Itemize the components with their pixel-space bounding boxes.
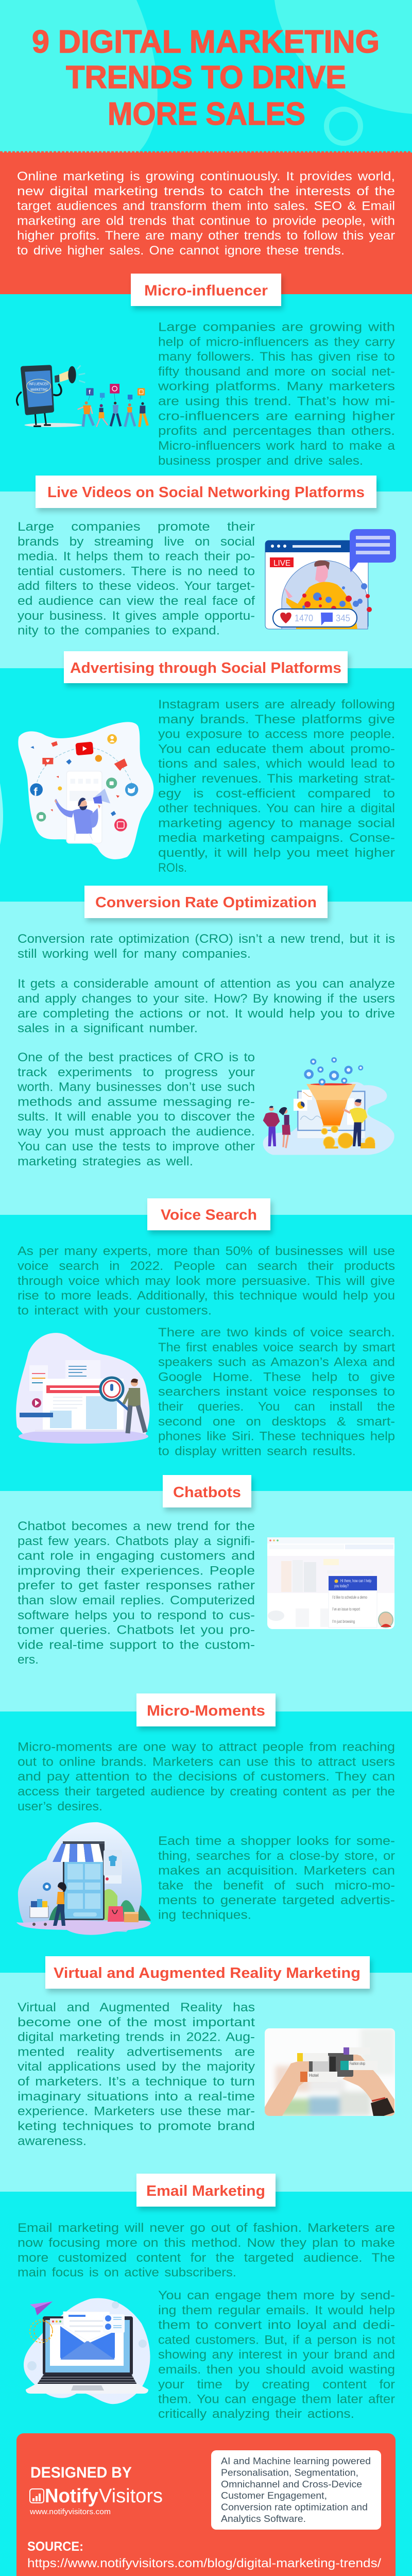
intro text: target audiences and transform them into sales. SEO & Email bbox=[17, 199, 395, 213]
text: conversion rate third paragraph: One of the best practices of CRO is to bbox=[18, 1050, 255, 1064]
text: email marketing second paragraph: your time by creating content for bbox=[158, 2378, 395, 2392]
heading: Chatbots bbox=[163, 1475, 251, 1507]
heading: Chatbots: Chatbots bbox=[173, 1484, 241, 1501]
heading: Live Videos bbox=[36, 476, 376, 508]
illustration: mobile shop and shopper bbox=[16, 1822, 151, 1935]
photo: hands holding phone with AR tags: Hotel bbox=[309, 2073, 319, 2078]
text: voice search second paragraph: their queries. You can install the bbox=[158, 1400, 395, 1414]
text: email marketing intro: main focus is on active subscribers. bbox=[18, 2266, 236, 2279]
description box: Customer Engagement, bbox=[221, 2490, 327, 2501]
text: conversion rate third paragraph: methods and assume messaging re- bbox=[18, 1095, 255, 1109]
description box bbox=[211, 2450, 381, 2530]
text: email marketing second paragraph: ing them regular emails. It would help bbox=[158, 2303, 395, 2317]
illustration: influencer marketing phone and followers: INFLUENCER bbox=[29, 382, 48, 386]
description box: AI and Machine learning powered bbox=[221, 2456, 371, 2466]
text: email marketing second paragraph: showing any interest in your brand and bbox=[158, 2348, 395, 2362]
description box: Analytics Software. bbox=[221, 2514, 306, 2524]
source: https://www.notifyvisitors.com/blog/digital-marketing-trends/ bbox=[27, 2556, 381, 2570]
text: micro-influencer: fifty thousand and more on social net- bbox=[158, 365, 395, 379]
text: conversion rate third paragraph: sults. It will enable you to discover the bbox=[18, 1110, 255, 1124]
text: chatbots: prefer to get faster responses rather bbox=[18, 1579, 255, 1592]
text: micro-influencer: are using this trend. That’s how mi- bbox=[158, 395, 395, 408]
text: micro-influencer bbox=[158, 320, 396, 468]
illustration: chatbot website screenshot: you today? bbox=[334, 1584, 349, 1588]
text: chatbots: Chatbot becomes a new trend for the bbox=[18, 1519, 255, 1533]
text: voice search second paragraph bbox=[158, 1326, 395, 1458]
section background: live videos bbox=[0, 492, 412, 668]
intro text: higher profits. There are many other trends to follow this year bbox=[17, 229, 395, 243]
text: virtual and augmented reality: mented reality advertisements are bbox=[18, 2045, 255, 2059]
text: conversion rate third paragraph: worth. Many businesses don’t use such bbox=[17, 1080, 255, 1094]
intro text: new digital marketing trends to catch the interests of the bbox=[17, 184, 395, 198]
section background: advertising bbox=[0, 668, 412, 902]
illustration: chatbot website screenshot bbox=[267, 1537, 394, 1629]
text: micro-influencer: profits and percentages than others. bbox=[158, 424, 395, 438]
heading: Virtual and Augmented Reality Marketing: Virtual and Augmented Reality Marketing bbox=[54, 1965, 360, 1981]
section background: email marketing bbox=[0, 2192, 412, 2576]
text: conversion rate intro: Conversion rate optimization (CRO) isn’t a new trend, but it is bbox=[18, 932, 395, 946]
text: voice search second paragraph: speakers such as Amazon’s Alexa and bbox=[158, 1355, 395, 1369]
intro text: Online marketing is growing continuously. It provides world, bbox=[17, 170, 395, 183]
text: voice search intro: As per many experts, more than 50% of businesses will use bbox=[18, 1244, 395, 1258]
text: advertising: Instagram users are already following bbox=[158, 698, 395, 711]
section background: chatbots bbox=[0, 1491, 412, 1711]
text: voice search second paragraph: second one on desktops & smart- bbox=[158, 1415, 395, 1429]
text: conversion rate second paragraph: sales in a significant number. bbox=[18, 1021, 198, 1036]
heading: Micro-influencer bbox=[131, 274, 281, 306]
text: chatbots: past few years. Chatbots play a signifi- bbox=[18, 1534, 255, 1548]
text: live videos: Large companies promote their bbox=[18, 520, 255, 534]
intro text bbox=[17, 170, 395, 258]
text: micro-influencer: cro-influencers are earning higher bbox=[158, 409, 395, 423]
source bbox=[27, 2539, 381, 2570]
text: micro-moments second paragraph: ing techniques. bbox=[158, 1908, 251, 1922]
text: micro-moments second paragraph: Each time a shopper looks for some- bbox=[158, 1834, 395, 1848]
heading: Conversion Rate Optimization bbox=[84, 886, 328, 918]
header background bbox=[0, 0, 412, 152]
text: micro-moments intro: access their targeted audience by creating content as per the bbox=[18, 1785, 395, 1799]
text: advertising: higher revenues. This marketing strat- bbox=[158, 772, 395, 786]
text: virtual and augmented reality: Virtual and Augmented Reality has bbox=[18, 2001, 255, 2014]
text: voice search second paragraph: Google Home. These help to give bbox=[158, 1370, 395, 1384]
description box: Omnichannel and Cross-Device bbox=[221, 2479, 362, 2489]
text: conversion rate third paragraph: way you must approach the audience. bbox=[17, 1125, 255, 1139]
text: micro-influencer: many followers. This has given rise to bbox=[158, 350, 395, 364]
section background: micro-moments bbox=[0, 1711, 412, 1973]
text: email marketing intro bbox=[18, 2221, 395, 2279]
text: virtual and augmented reality: imaginary situations into a real-time bbox=[18, 2090, 255, 2104]
text: voice search second paragraph: searchers instant voice responses to bbox=[158, 1385, 395, 1399]
section background: micro-influencer bbox=[0, 294, 412, 492]
designed by: DESIGNED BY bbox=[30, 2464, 132, 2481]
heading: Virtual and Augmented Reality Marketing bbox=[45, 1956, 370, 1989]
text: chatbots: software helps you to respond to cus- bbox=[18, 1608, 255, 1622]
text: voice search second paragraph: phones like Siri. These techniques help bbox=[158, 1430, 395, 1444]
footer panel bbox=[16, 2433, 396, 2576]
intro text: to drive higher sales. One cannot ignore these trends. bbox=[17, 244, 345, 258]
text: voice search second paragraph: to display written search results. bbox=[158, 1445, 356, 1458]
text: micro-influencer: working platforms. Many marketers bbox=[158, 380, 395, 394]
text: live videos: your business. It gives ample opportu- bbox=[18, 609, 255, 623]
text: conversion rate second paragraph: It gets a considerable amount of attention as you can analyze bbox=[18, 977, 395, 991]
text: email marketing second paragraph: emails. then you should avoid wasting bbox=[158, 2363, 395, 2377]
illustration: voice search bbox=[16, 1333, 149, 1444]
text: advertising: many brands. These platforms give bbox=[158, 713, 395, 726]
text: chatbots: ers. bbox=[18, 1653, 39, 1667]
website: www.notifyvisitors.com bbox=[29, 2507, 111, 2516]
text: advertising bbox=[158, 698, 395, 875]
photo: hands holding phone with AR tags bbox=[265, 2028, 395, 2116]
text: email marketing intro: more customized content for the targeted audience. The bbox=[18, 2251, 395, 2265]
text: advertising: marketing agency to manage social bbox=[158, 816, 395, 830]
text: email marketing intro: now focusing more on this method. Now they plan to make bbox=[18, 2236, 395, 2250]
text: advertising: other techniques. You can hire a digital bbox=[158, 802, 395, 816]
text: micro-moments second paragraph: ments to generate targeted advertis- bbox=[158, 1893, 395, 1907]
description box: Personalisation, Segmentation, bbox=[221, 2468, 358, 2478]
section background: intro bbox=[0, 152, 412, 294]
text: live videos: nity to the companies to expand. bbox=[18, 623, 220, 638]
illustration: social media advertising: f bbox=[33, 785, 38, 798]
text: advertising: tions and sales, which would lead to bbox=[158, 757, 395, 771]
text: conversion rate second paragraph: are completing the actions or not. It would help you to drive bbox=[18, 1007, 395, 1021]
illustration: chatbot website screenshot: I’m just browsing bbox=[332, 1619, 355, 1624]
text: live videos: ed audience can view the real face of bbox=[18, 594, 255, 608]
text: micro-moments intro: Micro-moments are one way to attract people from reaching bbox=[18, 1740, 395, 1754]
text: advertising: quently, it will help you meet higher bbox=[158, 846, 395, 860]
illustration: influencer marketing phone and followers: f bbox=[89, 389, 91, 396]
text: voice search intro bbox=[18, 1244, 395, 1318]
heading: Voice Search: Voice Search bbox=[161, 1207, 257, 1223]
text: virtual and augmented reality: keting techniques to promote brand bbox=[18, 2119, 255, 2133]
text: chatbots: than slow email replies. Computerized bbox=[18, 1594, 255, 1607]
text: voice search intro: voice search in 2022. People can search their products bbox=[18, 1259, 395, 1273]
text: conversion rate second paragraph bbox=[18, 977, 395, 1036]
text: micro-moments intro bbox=[18, 1740, 395, 1814]
text: email marketing second paragraph: You can engage them more by send- bbox=[158, 2289, 395, 2302]
heading: Micro-influencer: Micro-influencer bbox=[144, 282, 268, 299]
heading: Advertising: Advertising through Social Platforms bbox=[70, 660, 341, 676]
text: email marketing second paragraph: cated customers. But, if a person is not bbox=[158, 2333, 395, 2347]
title: TRENDS TO DRIVE bbox=[66, 60, 346, 95]
text: conversion rate third paragraph bbox=[17, 1050, 255, 1168]
text: live videos: brands by streaming live on social bbox=[18, 535, 255, 549]
description box: Conversion rate optimization and bbox=[221, 2502, 368, 2512]
text: advertising: you exposure to access more people. bbox=[158, 727, 395, 741]
text: micro-influencer: business prosper and drive sales. bbox=[158, 454, 363, 468]
text: micro-moments intro: and pay attention to the decisions of customers. They can bbox=[18, 1770, 395, 1784]
text: conversion rate second paragraph: and apply changes to your site. How? By knowing if the users bbox=[18, 992, 395, 1006]
text: micro-influencer: Micro-influencers work hard to make a bbox=[158, 439, 396, 453]
text: virtual and augmented reality: become one of the most important bbox=[18, 2015, 255, 2029]
text: email marketing second paragraph: them. You can engage them later after bbox=[158, 2393, 395, 2406]
text: virtual and augmented reality: of marketers. It’s a technique to turn bbox=[18, 2075, 255, 2089]
illustration: live video window bbox=[265, 529, 396, 629]
text: virtual and augmented reality bbox=[18, 2001, 255, 2148]
heading: Micro-Moments: Micro-Moments bbox=[147, 1703, 265, 1719]
illustration: influencer marketing phone and followers: MARKETING bbox=[30, 388, 48, 392]
illustration: laptop with email envelope bbox=[24, 2298, 150, 2404]
text: chatbots: tomer queries. Chatbots let you pro- bbox=[18, 1623, 255, 1637]
section background: conversion rate optimization bbox=[0, 902, 412, 1215]
text: advertising: ROIs. bbox=[158, 861, 187, 875]
text: virtual and augmented reality: vital applications used by the majority bbox=[18, 2060, 255, 2074]
text: voice search intro: through voice which may look more persuasive. This will give bbox=[18, 1274, 395, 1288]
title: 9 DIGITAL MARKETING bbox=[32, 24, 380, 60]
text: live videos: media. It helps them to reach their po- bbox=[18, 549, 255, 564]
title bbox=[32, 24, 380, 132]
text: micro-moments second paragraph: thing, searches for a close-by store, or bbox=[158, 1849, 395, 1863]
title: MORE SALES bbox=[108, 96, 305, 132]
illustration: live video window: 1470 bbox=[295, 613, 313, 623]
logo: NotifyVisitors: Notify bbox=[45, 2485, 98, 2507]
heading: Conversion Rate Optimization: Conversion Rate Optimization bbox=[95, 894, 317, 911]
text: micro-moments second paragraph: take the benefit of such micro-mo- bbox=[158, 1878, 395, 1892]
text: micro-moments intro: out to online brands. Marketers can use this to attract users bbox=[18, 1755, 395, 1769]
illustration: live video window: 345 bbox=[336, 613, 350, 623]
section background: voice search bbox=[0, 1215, 412, 1491]
text: voice search second paragraph: The first enables voice search by smart bbox=[158, 1341, 395, 1354]
section background: virtual and augmented reality bbox=[0, 1973, 412, 2192]
text: micro-influencer: Large companies are growing with bbox=[158, 320, 395, 334]
text: email marketing second paragraph: them to convert into loyal and dedi- bbox=[158, 2318, 395, 2332]
text: email marketing second paragraph bbox=[158, 2289, 395, 2421]
text: conversion rate intro: still working well for many companies. bbox=[18, 947, 251, 961]
text: live videos: tential customers. There is no need to bbox=[18, 564, 255, 578]
text: voice search intro: rise to more leads. Additionally, this technique would help you bbox=[18, 1289, 395, 1302]
text: virtual and augmented reality: experience. Marketers use these mar- bbox=[18, 2105, 255, 2119]
illustration: chatbot website screenshot: Hi there, how can I help bbox=[340, 1579, 371, 1583]
text: virtual and augmented reality: awareness. bbox=[18, 2134, 87, 2148]
illustration: conversion funnel bbox=[263, 1057, 394, 1155]
illustration: live video window: LIVE bbox=[273, 559, 290, 568]
text: chatbots: cant role in engaging customers and bbox=[18, 1549, 255, 1563]
text: chatbots: vide real-time support to the custom- bbox=[18, 1638, 255, 1652]
illustration: chatbot website screenshot: I’ve an issue to report bbox=[332, 1607, 360, 1612]
heading: Micro-Moments bbox=[136, 1693, 276, 1726]
text: live videos: add filters to these videos. Your target- bbox=[18, 579, 255, 593]
text: conversion rate intro bbox=[18, 932, 395, 961]
illustration: social media advertising bbox=[18, 722, 153, 859]
heading: Live Videos: Live Videos on Social Networking Platforms bbox=[47, 484, 365, 501]
heading: Email Marketing bbox=[136, 2174, 276, 2207]
text: chatbots: improving their experiences. People bbox=[18, 1564, 255, 1578]
text: micro-moments second paragraph: makes an acquisition. Marketers can bbox=[158, 1864, 395, 1878]
text: micro-moments second paragraph bbox=[158, 1834, 395, 1922]
heading: Advertising bbox=[64, 651, 348, 683]
text: advertising: media marketing campaigns. Conse- bbox=[158, 831, 395, 845]
text: advertising: You can educate them about promo- bbox=[158, 742, 395, 756]
text: voice search second paragraph: There are two kinds of voice search. bbox=[158, 1326, 395, 1340]
illustration: influencer marketing phone and followers bbox=[17, 365, 148, 427]
heading: Voice Search bbox=[147, 1198, 270, 1230]
text: email marketing second paragraph: critically analyzing their actions. bbox=[158, 2407, 354, 2421]
text: live videos bbox=[18, 520, 255, 638]
photo: hands holding phone with AR tags: Fashion shop bbox=[350, 2061, 365, 2066]
text: micro-moments intro: user’s desires. bbox=[18, 1800, 102, 1814]
text: advertising: egy is cost-efficient compared to bbox=[158, 787, 395, 801]
heading: Email Marketing: Email Marketing bbox=[146, 2183, 265, 2199]
text: micro-influencer: help of micro-influencers as they carry bbox=[158, 335, 395, 349]
text: chatbots bbox=[18, 1519, 255, 1667]
intro text: marketing are old trends that continue to provide people, with bbox=[17, 214, 395, 228]
illustration: chatbot website screenshot: I’d like to schedule a demo bbox=[332, 1595, 367, 1600]
text: virtual and augmented reality: digital marketing trends in 2022. Aug- bbox=[18, 2030, 255, 2044]
text: voice search intro: to interact with your customers. bbox=[18, 1303, 212, 1318]
logo: NotifyVisitors: Visitors bbox=[99, 2485, 163, 2507]
source: SOURCE: bbox=[27, 2539, 83, 2554]
text: conversion rate third paragraph: marketing strategies as well. bbox=[18, 1155, 193, 1168]
text: email marketing intro: Email marketing will never go out of fashion. Marketers are bbox=[18, 2221, 395, 2235]
text: conversion rate third paragraph: track experiments to progress your bbox=[18, 1065, 255, 1079]
text: conversion rate third paragraph: You can use the tests to improve other bbox=[18, 1140, 255, 1154]
logo: NotifyVisitors bbox=[30, 2485, 163, 2507]
